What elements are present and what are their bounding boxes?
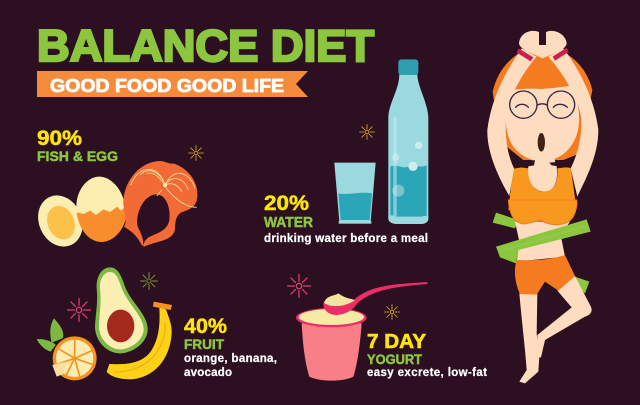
shorts — [515, 255, 575, 295]
arms — [487, 48, 537, 196]
text block: fruit: FRUIT — [184, 336, 224, 352]
text block: water: 20% — [264, 191, 309, 215]
tape measure back — [493, 213, 589, 293]
bangs — [513, 53, 572, 88]
icon: cracked egg — [76, 177, 126, 242]
neck — [528, 155, 557, 192]
ribbon banner — [37, 71, 308, 97]
text block: water — [264, 191, 428, 245]
decorative burst: green near avocado — [140, 272, 158, 290]
icon: fruit group — [37, 267, 172, 380]
text block: water: WATER — [264, 214, 313, 231]
icon: glass — [334, 163, 376, 224]
shoulder shadows — [510, 160, 574, 169]
text block: yogurt: 7 DAY — [367, 331, 427, 353]
icon: avocado — [95, 267, 148, 353]
icon: bottle — [388, 59, 428, 224]
text block: fish and egg: FISH & EGG — [37, 148, 118, 164]
text block: yogurt: YOGURT — [367, 352, 423, 367]
raised leg — [537, 276, 592, 357]
decorative burst: yellow near fish — [188, 146, 204, 160]
title: BALANCE DIET — [37, 22, 374, 71]
face — [505, 86, 579, 161]
decorative burst: yellow near yogurt — [384, 304, 400, 320]
icon: water glass and bottle — [334, 59, 428, 224]
closed eyes — [516, 104, 567, 107]
wristbands — [517, 48, 569, 61]
ribbon text: GOOD FOOD GOOD LIFE — [50, 76, 284, 96]
glasses — [510, 91, 575, 118]
icon: salmon steak — [123, 161, 197, 247]
decorative burst: pink near avocado — [68, 298, 90, 322]
figure: upper body — [487, 31, 598, 210]
text block: water: drinking water before a meal — [264, 233, 428, 245]
decorative burst: yellow near bottle — [360, 124, 374, 140]
mouth — [538, 133, 545, 152]
standing leg — [519, 293, 539, 383]
icon: leaves — [37, 318, 63, 352]
hands — [519, 31, 567, 58]
text block: yogurt — [367, 331, 487, 379]
hair back — [493, 46, 592, 160]
text block: fruit — [184, 315, 277, 379]
tank top upper — [508, 167, 577, 210]
icon: yogurt cup with spoon — [296, 282, 427, 381]
torso — [515, 222, 570, 262]
text block: fruit: 40% — [184, 315, 227, 338]
text block: yogurt: easy excrete, low-fat — [367, 367, 487, 379]
icon: cup — [296, 308, 367, 381]
figure: woman with tape measure — [487, 31, 598, 383]
figure: lower body — [493, 200, 592, 383]
decorative burst: pink near yogurt — [288, 274, 310, 298]
icon: spoon — [323, 282, 427, 315]
text block: fish and egg: 90% — [37, 126, 82, 150]
text block: fruit: orange, banana, — [184, 353, 277, 365]
tank top lower — [508, 200, 577, 225]
tape measure front — [496, 219, 591, 263]
text block: fish and egg — [37, 126, 118, 164]
icon: banana — [107, 302, 172, 379]
icon: peeled egg — [30, 188, 91, 254]
icon: orange slice — [52, 336, 97, 380]
text block: fruit: avocado — [184, 367, 232, 379]
icon: eggs and salmon — [30, 161, 197, 254]
